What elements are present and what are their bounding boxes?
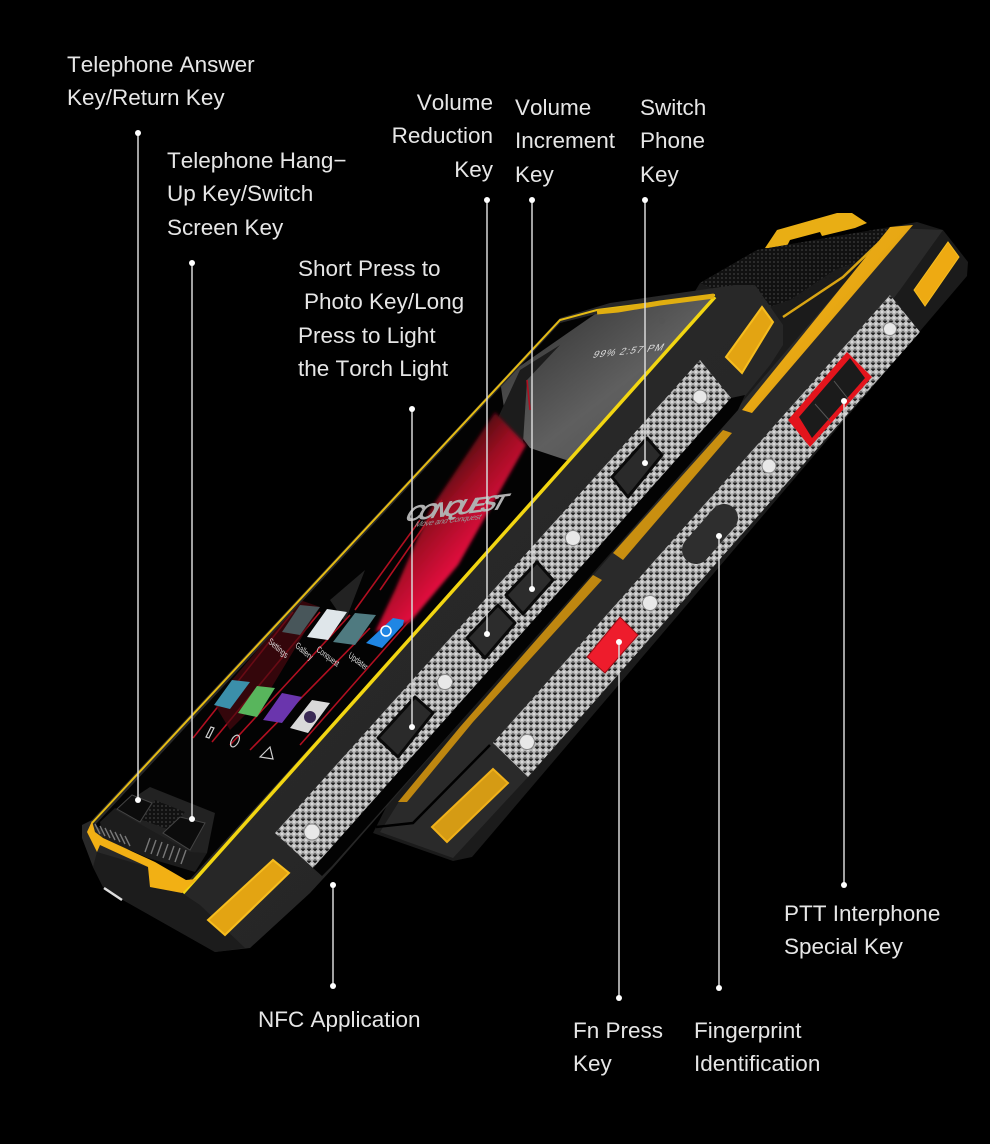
label: volume reduction key: Reduction [392,123,493,148]
label: Fn press key: Fn Press [573,1018,663,1043]
back metal strip [493,295,920,777]
back phone side strip [380,228,943,858]
wallpaper tagline: Move and Conquest [413,512,485,529]
lower front panel [100,808,207,872]
leader: fingerprint [716,533,722,991]
dark red glow [215,600,320,730]
back yellow bumper top [914,242,959,306]
answer key [117,795,152,822]
status bar: 99% 2:57 PM [591,342,666,361]
label: volume reduction key: Volume [417,90,493,115]
textured battery cover [700,227,890,310]
black side edge [313,395,745,876]
front phone body [82,285,783,952]
leader lines [135,130,847,1001]
dark wallpaper facet [497,345,560,443]
back screws [520,322,896,750]
label: Fn press key: Key [573,1051,613,1076]
Fingerprint sensor [696,518,724,550]
back yellow bumper bottom [432,769,508,842]
label: telephone answer key: Key/Return Key [67,85,225,110]
leader: hang-up key [189,260,195,822]
front key cluster [95,787,215,864]
Fn red key [587,617,638,673]
volume increment key [506,562,553,614]
front phone chin [93,852,245,952]
leader: volume increment [529,197,535,592]
leader: telephone answer key [135,130,141,803]
camera lens [659,318,665,324]
label: volume increment key: Key [515,162,555,187]
front screws [304,390,707,840]
icon caption settings: Settings [267,636,289,661]
label: photo and torch key: Press to Light [298,323,436,348]
icon caption updater: Updater [347,650,370,673]
leader: Fn key [616,639,622,1001]
yellow side stripe lower [398,575,602,802]
yellow side stripe upper [742,225,913,413]
speaker [142,800,185,830]
thin yellow arm near camera [783,232,890,317]
chin flash highlight [104,888,122,900]
label: NFC application: NFC Application [258,1007,421,1032]
app icons [214,605,404,733]
yellow top clip [765,213,867,250]
yellow bumper top [726,307,773,373]
back body seam [376,745,490,827]
leader: NFC [330,882,336,989]
label: telephone hang-up key: Telephone Hang− [167,148,347,173]
leader: PTT [841,398,847,888]
label: volume reduction key: Key [454,157,494,182]
hang-up key [163,817,205,850]
label: fingerprint identification: Identification [694,1051,820,1076]
screen yellow rims [92,295,715,893]
label: photo and torch key: the Torch Light [298,356,449,381]
yellow bumper bottom [208,860,289,935]
volume reduction key [467,605,515,658]
label: PTT interphone special key: PTT Interphone [784,901,940,926]
label: switch phone key: Phone [640,128,705,153]
nav buttons [206,727,273,759]
red wallpaper band [375,412,526,632]
grey wallpaper top [500,298,712,462]
back phone [373,213,968,861]
screen [96,299,710,880]
label: switch phone key: Switch [640,95,706,120]
yellow chin lip [87,821,197,893]
back phone body [373,222,968,861]
label: volume increment key: Volume [515,95,591,120]
camera hole [852,273,862,283]
yellow side stripe middle [613,430,732,560]
switch phone key [612,438,662,497]
label: volume increment key: Increment [515,128,616,153]
front metal strip [275,360,731,868]
label: telephone hang-up key: Up Key/Switch [167,181,313,206]
photo key [378,697,433,757]
PTT red key [788,352,872,447]
label: telephone hang-up key: Screen Key [167,215,284,240]
leader: switch phone [642,197,648,466]
label: photo and torch key: Photo Key/Long [304,289,464,314]
front phone [80,280,783,952]
grey wallpaper facet [330,570,365,622]
leader: volume reduction [484,197,490,637]
label: photo and torch key: Short Press to [298,256,441,281]
vents [95,824,186,864]
label: fingerprint identification: Fingerprint [694,1018,802,1043]
wallpaper logo: CONQUEST [400,489,514,528]
red streaks [193,380,530,750]
icon caption conquest: Conquest [315,644,341,670]
icon caption gallery: Gallery [294,640,314,663]
label: telephone answer key: Telephone Answer [67,52,255,77]
label: switch phone key: Key [640,162,680,187]
leader: photo key [409,406,415,730]
label: PTT interphone special key: Special Key [784,934,904,959]
